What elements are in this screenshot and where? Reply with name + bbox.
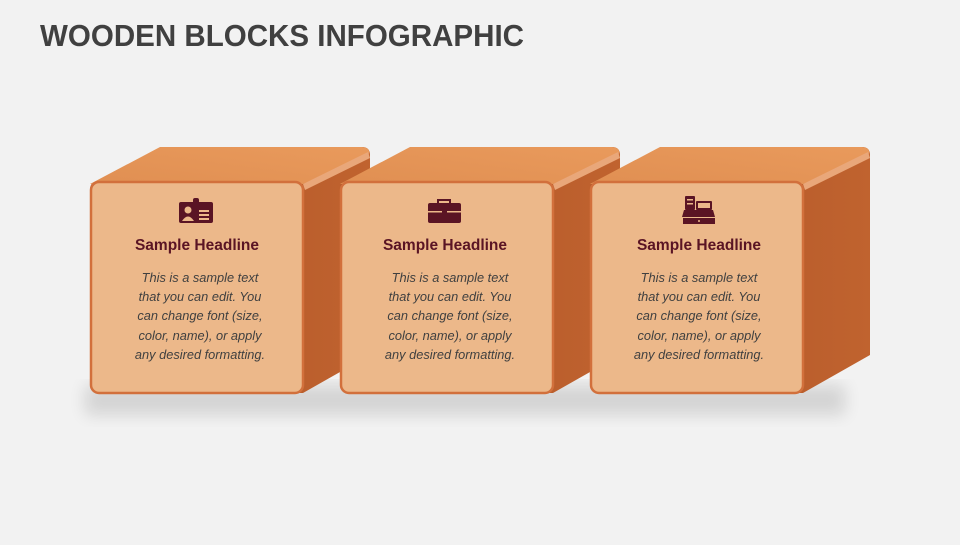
icon: cash register: [682, 196, 715, 224]
icon: briefcase: [428, 199, 461, 223]
text 3: color, name), or apply: [637, 328, 762, 343]
text 3: any desired formatting.: [634, 347, 764, 362]
block 1: [90, 147, 370, 393]
text 1: that you can edit. You: [139, 289, 261, 304]
text 1: any desired formatting.: [135, 347, 265, 362]
headline 3: Sample Headline: [637, 237, 761, 254]
text 1: This is a sample text: [142, 270, 259, 285]
text 2: This is a sample text: [392, 270, 509, 285]
text 1: can change font (size,: [137, 308, 263, 323]
block 2: [340, 147, 620, 393]
text 3: can change font (size,: [636, 308, 762, 323]
text 2: any desired formatting.: [385, 347, 515, 362]
icon: id badge: [179, 198, 213, 223]
headline 2: Sample Headline: [383, 237, 507, 254]
headline 1: Sample Headline: [135, 237, 259, 254]
text 3: that you can edit. You: [638, 289, 760, 304]
text 2: color, name), or apply: [388, 328, 513, 343]
block 3: [590, 147, 870, 393]
text 1: color, name), or apply: [138, 328, 263, 343]
text 3: This is a sample text: [641, 270, 758, 285]
text 2: can change font (size,: [387, 308, 513, 323]
shadows: [85, 385, 845, 415]
text 2: that you can edit. You: [389, 289, 511, 304]
title: WOODEN BLOCKS INFOGRAPHIC: [40, 18, 524, 53]
